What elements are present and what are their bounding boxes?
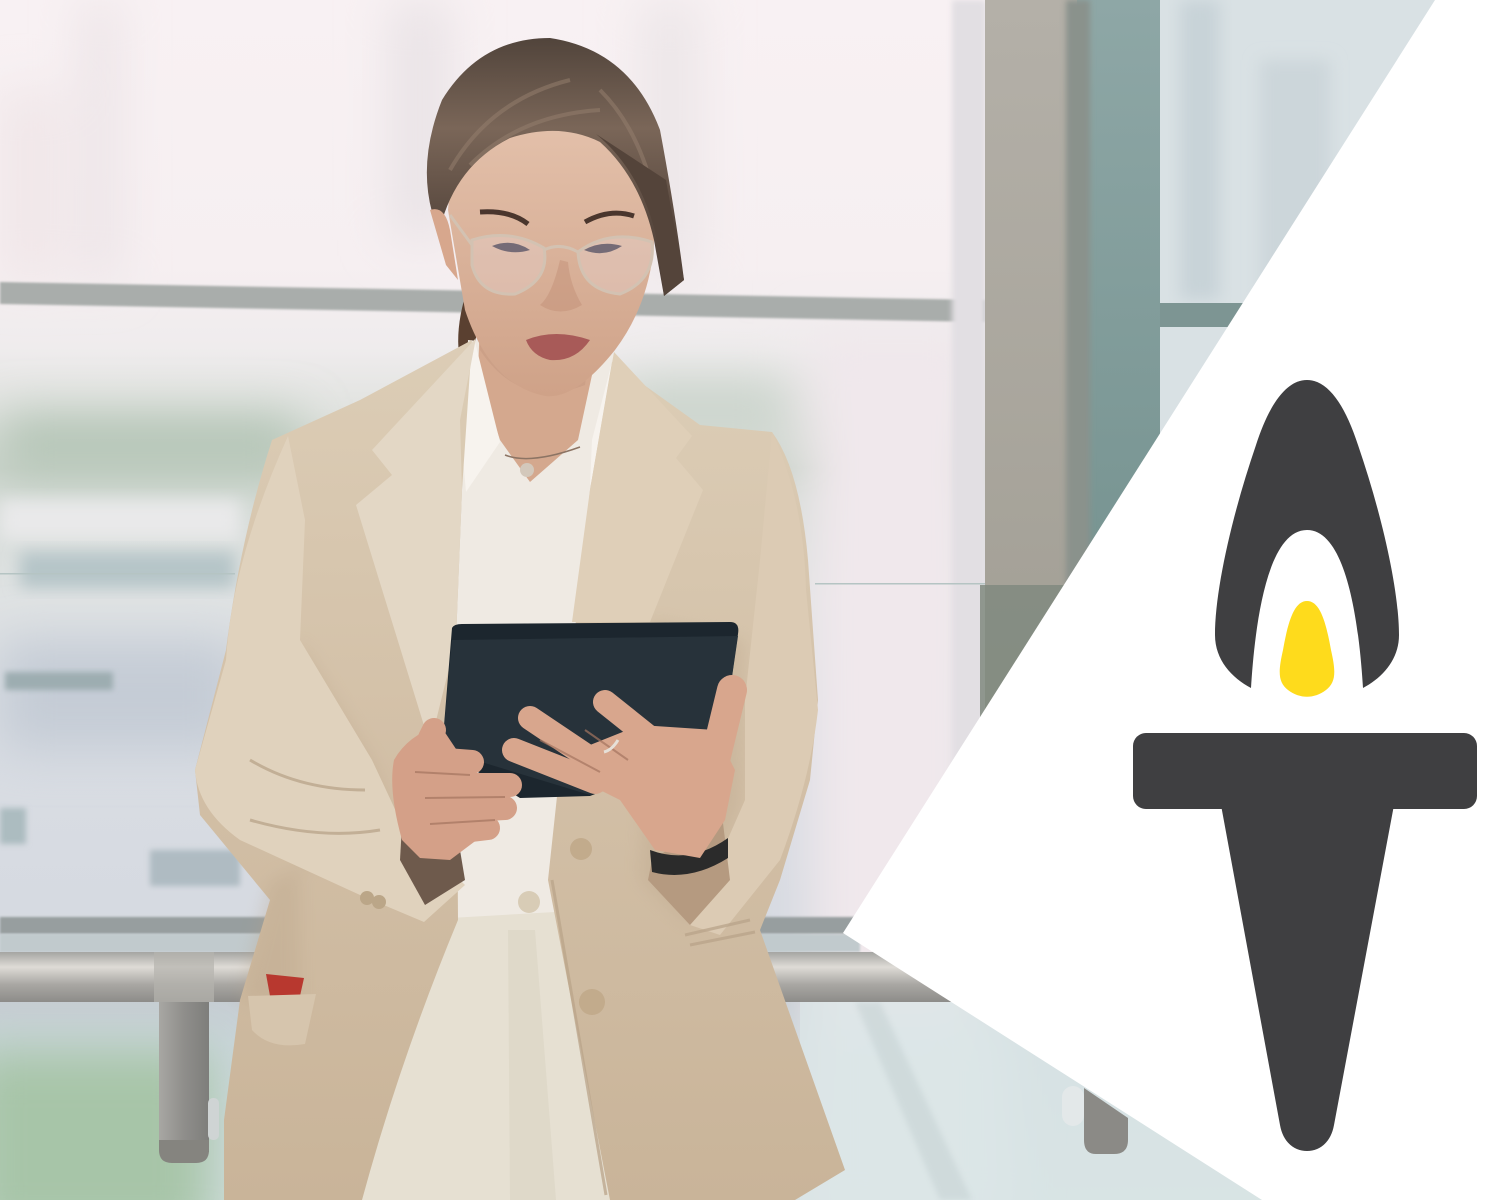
window mullions [0, 282, 985, 322]
lips [526, 334, 590, 360]
pillar [985, 0, 1077, 780]
shirt [450, 340, 614, 918]
ear [430, 209, 458, 280]
eyebrows [480, 212, 528, 224]
icon: torch crossbar [1133, 733, 1477, 809]
icon: torch handle [1221, 805, 1394, 1151]
lapels [356, 338, 476, 745]
neck [478, 320, 592, 482]
creases and details [250, 760, 755, 1195]
icon: torch logo [1133, 380, 1477, 1151]
cuffs [400, 825, 465, 905]
icon: yellow flame core [1280, 601, 1334, 697]
sleeves [195, 436, 465, 922]
buttons [570, 838, 592, 860]
head [448, 125, 655, 396]
icon: outer flame [1215, 380, 1399, 688]
nose [540, 260, 582, 312]
pocket with red item [266, 974, 304, 996]
eyes [492, 243, 530, 252]
hair [427, 38, 684, 296]
collar [460, 342, 500, 492]
left hand [392, 725, 510, 860]
ponytail [458, 300, 476, 354]
blazer shading [240, 640, 400, 1010]
blazer body [195, 340, 472, 1200]
white diagonal panel [843, 0, 1500, 1200]
glasses [450, 215, 652, 294]
woman [195, 38, 845, 1200]
railing [0, 952, 1128, 1163]
right hand [415, 690, 735, 858]
trousers [360, 910, 612, 1200]
tablet [442, 622, 738, 798]
